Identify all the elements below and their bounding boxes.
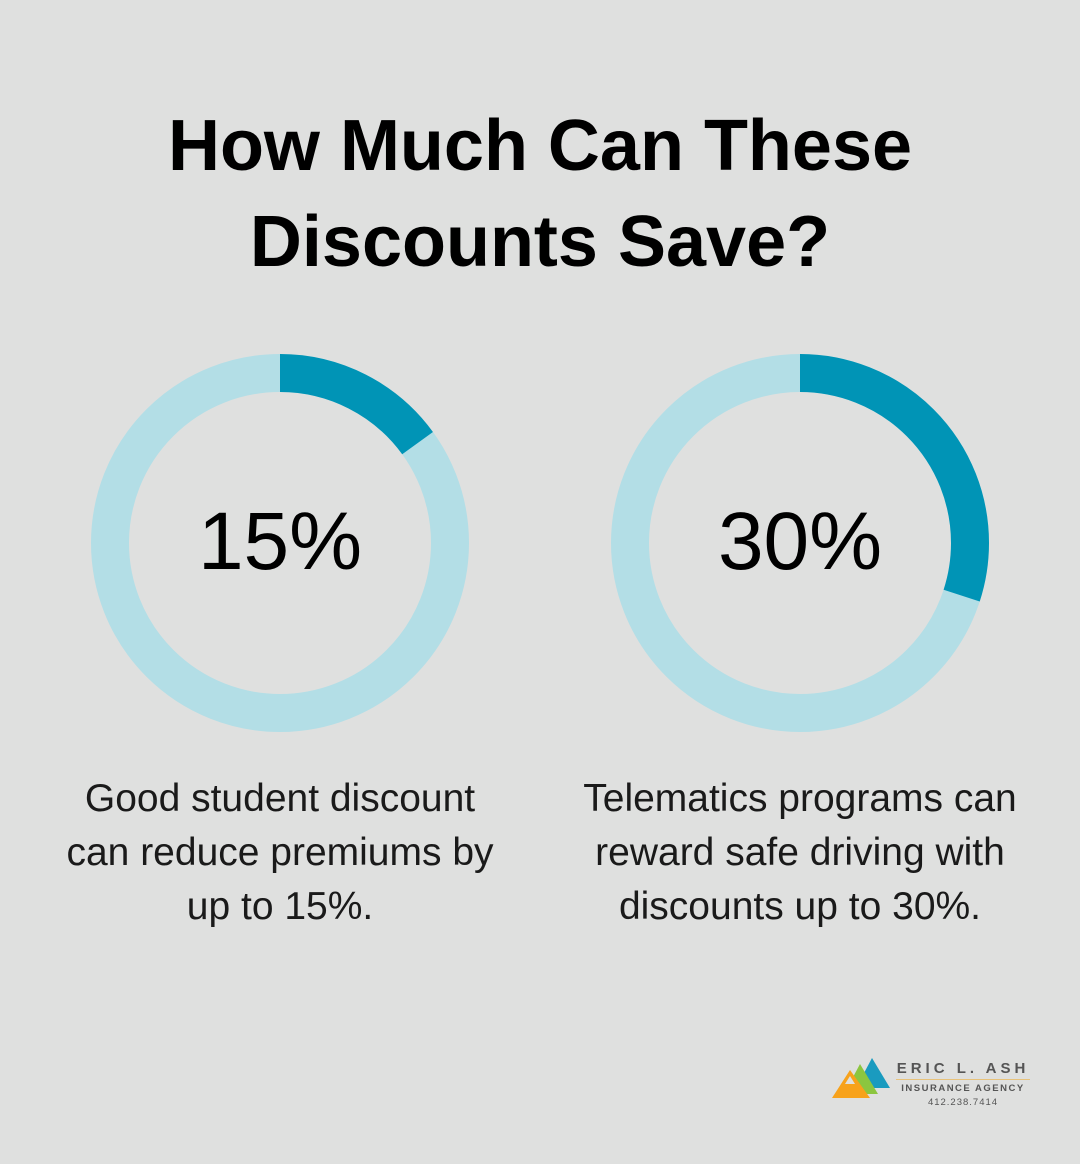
title: Discounts Save? xyxy=(250,202,830,282)
title: How Much Can These xyxy=(168,106,912,186)
text: good student discount xyxy=(66,777,494,928)
donut chart: 30%: 30% xyxy=(718,496,882,587)
donut chart: 15% xyxy=(91,354,469,732)
title xyxy=(168,106,912,282)
text: good student discount: up to 15%. xyxy=(187,885,373,928)
text: good student discount: Good student discount xyxy=(85,777,475,820)
logo text: ERIC L. ASH xyxy=(897,1060,1029,1077)
logo xyxy=(832,1058,1030,1108)
logo text xyxy=(896,1060,1030,1108)
donut chart: 15%: 15% xyxy=(198,496,362,587)
logo text: INSURANCE AGENCY xyxy=(901,1083,1025,1094)
donut chart: 30% xyxy=(611,354,989,732)
text: good student discount: can reduce premiums by xyxy=(66,831,494,874)
text: telematics programs: Telematics programs can reward safe driving with discounts up to 30%. xyxy=(583,777,1017,928)
icon: mountains xyxy=(832,1058,890,1098)
logo text: 412.238.7414 xyxy=(928,1097,998,1108)
